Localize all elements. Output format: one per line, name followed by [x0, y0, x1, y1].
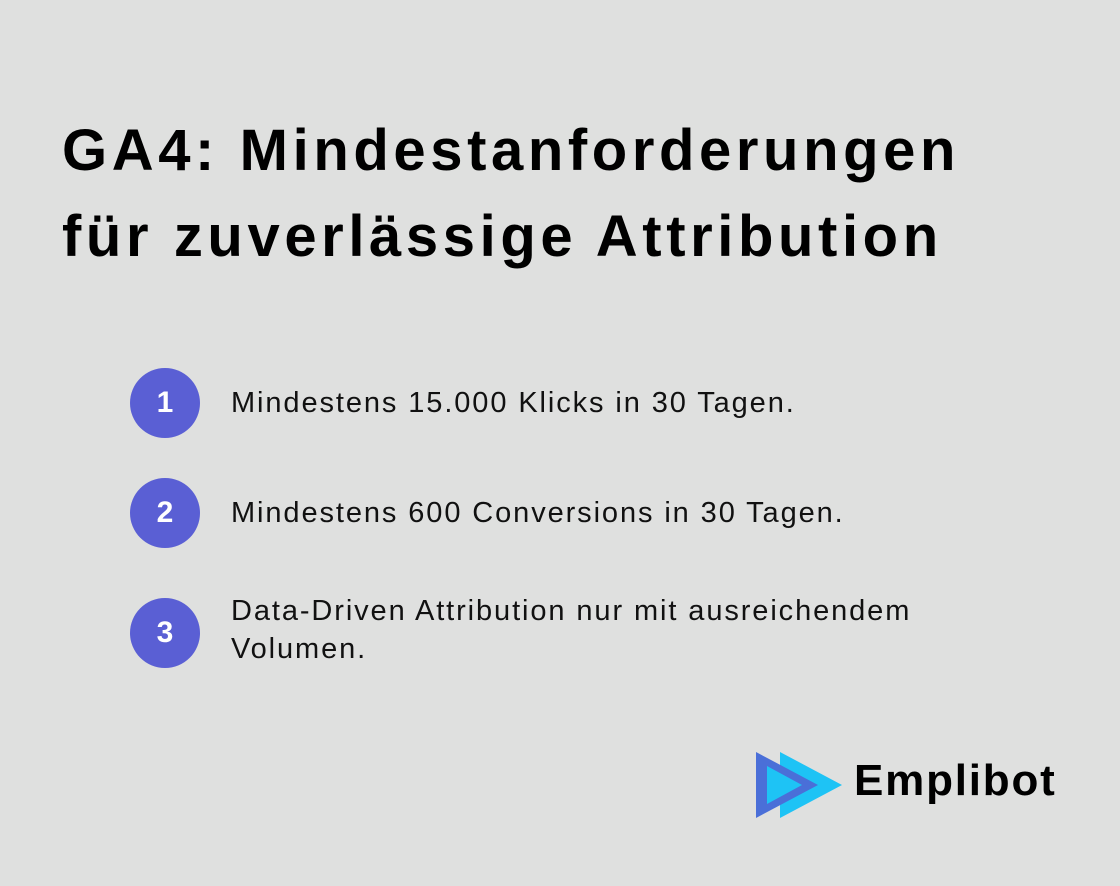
title: GA4: Mindestanforderungen [62, 118, 960, 183]
item 2 [130, 478, 845, 548]
circle 3: 3 [157, 616, 173, 649]
title [62, 118, 960, 269]
text 3: Volumen. [231, 633, 367, 665]
text 1: Mindestens 15.000 Klicks in 30 Tagen. [231, 387, 796, 419]
item 3 [130, 595, 911, 668]
circle 2 [130, 478, 200, 548]
circle 2: 2 [157, 496, 173, 529]
icon: logo triangles [756, 752, 842, 818]
text 3: Data-Driven Attribution nur mit ausreichendem [231, 595, 911, 627]
circle 3 [130, 598, 200, 668]
title: für zuverlässige Attribution [62, 204, 943, 269]
circle 1 [130, 368, 200, 438]
circle 1: 1 [157, 386, 173, 419]
text 2: Mindestens 600 Conversions in 30 Tagen. [231, 497, 845, 529]
item 1 [130, 368, 796, 438]
brand name: Emplibot [854, 756, 1057, 805]
text 3 [231, 595, 911, 665]
logo [756, 752, 1057, 818]
